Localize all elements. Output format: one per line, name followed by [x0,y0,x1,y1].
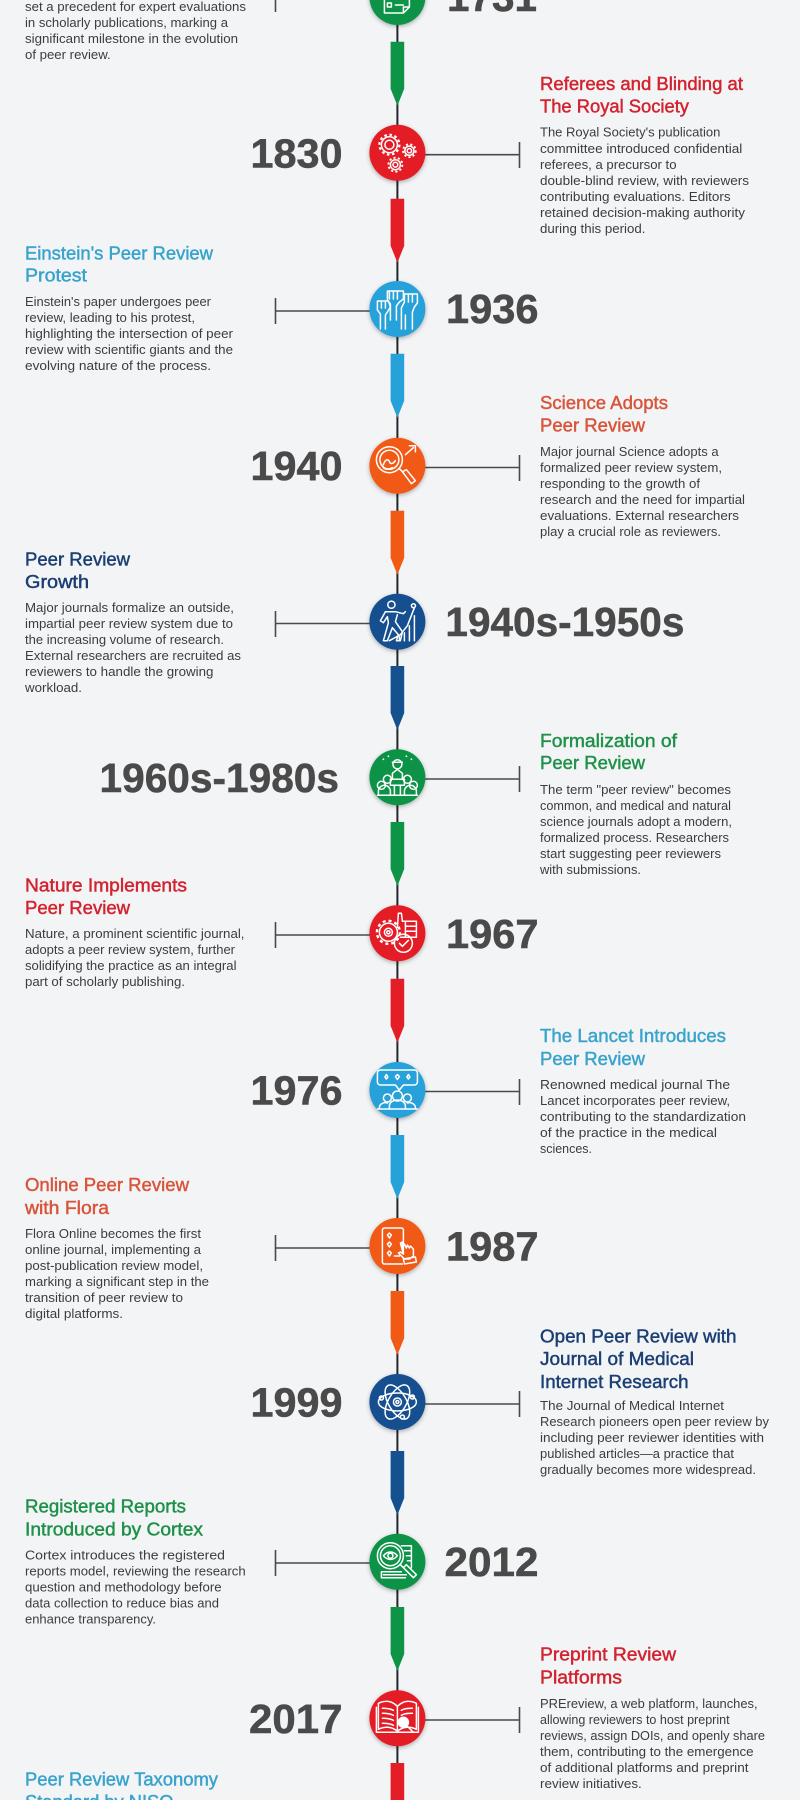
body text 2012: Cortex introduces the registered [25,1547,225,1562]
body text 1731 [25,0,246,62]
body text 1960s-1980s: common, and medical and natural [540,798,731,813]
heading 1830: Referees and Blinding at [540,74,743,94]
body text 1999: The Journal of Medical Internet [540,1398,724,1413]
heading 1987: Online Peer Review [25,1175,190,1195]
heading 1940: Science Adopts [540,393,668,413]
entry: 1987 [24,1175,538,1321]
heading 1987 [24,1175,190,1218]
year 1960s-1980s: 1960s-1980s [100,755,339,801]
connector 1940s-1950s [276,611,370,637]
body text 1940: research and the need for impartial [540,492,745,507]
connector 1976 [425,1079,520,1105]
body text 2012 [25,1547,246,1626]
arrow bar green [391,42,404,106]
body text 1830: The Royal Society's publication [540,125,720,140]
body text 1940s-1950s: workload. [24,680,82,695]
heading 1987: with Flora [24,1198,110,1218]
icon: meeting table [369,749,425,805]
heading 1976 [540,1026,726,1069]
connector 1940 [425,455,520,481]
entry: 1731 [25,0,537,62]
body text 2012: enhance transparency. [25,1612,156,1626]
body text 1960s-1980s: with submissions. [539,862,641,877]
heading 1940s-1950s: Peer Review [25,550,131,570]
body text 1999: Research pioneers open peer review by [540,1414,769,1429]
body text 2012: reports model, reviewing the research [25,1564,246,1578]
body text 1976: of the practice in the medical [540,1125,717,1140]
entry: 1940 [250,393,745,539]
heading 1999: Internet Research [540,1372,688,1392]
body text 1976: contributing to the standardization [540,1109,746,1124]
arrow bar green 2 [391,822,404,886]
arrow bar red 3 [391,1763,404,1800]
heading 2012: Introduced by Cortex [25,1520,203,1540]
connector 1960s-1980s [425,766,520,792]
heading 1999: Journal of Medical [540,1349,694,1369]
year 1936: 1936 [446,286,538,332]
connector 2017 [425,1707,520,1733]
body text 1987: online journal, implementing a [25,1242,202,1257]
heading 1976: The Lancet Introduces [540,1026,726,1046]
body text 1987: digital platforms. [25,1306,123,1321]
entry: 1936 [25,243,538,373]
body text 1960s-1980s: start suggesting peer reviewers [540,846,721,861]
heading 1999: Open Peer Review with [540,1326,736,1346]
body text 1830: committee introduced confidential [540,141,742,156]
timeline spine [396,0,398,1800]
year 2017: 2017 [249,1696,342,1742]
heading 1936: Einstein's Peer Review [25,243,214,263]
body text 1731: in scholarly publications, marking a [25,15,229,30]
heading 1967: Nature Implements [25,876,187,896]
icon: rating bubble and people [369,1062,425,1118]
heading 1960s-1980s [540,731,678,773]
heading 1936 [25,243,214,286]
body text 1987: transition of peer review to [25,1290,183,1305]
entry: 1960s-1980s [100,731,732,877]
heading 1967 [25,876,187,918]
connector 2012 [276,1550,370,1576]
body text 1960s-1980s: The term "peer review" becomes [540,782,731,797]
body text 1987: Flora Online becomes the first [25,1226,201,1241]
year 1940: 1940 [250,443,342,489]
heading 1960s-1980s: Peer Review [540,753,646,773]
body text 1967: adopts a peer review system, further [25,942,236,957]
body text 2012: data collection to reduce bias and [25,1596,219,1610]
icon: gear thumb and check [369,905,425,961]
body text 1940s-1950s [24,600,242,695]
body text 1830 [540,125,750,236]
year 1967: 1967 [446,911,538,957]
body text 1967: part of scholarly publishing. [25,974,185,989]
entry: 2017 [249,1645,765,1791]
body text 1936: highlighting the intersection of peer [25,326,234,341]
body text 2017: of additional platforms and preprint [540,1760,749,1775]
icon: atom [369,1374,425,1430]
arrow bar orange 2 [391,1291,404,1355]
body text 2017: PREreview, a web platform, launches, [540,1696,758,1711]
heading 1960s-1980s: Formalization of [540,731,678,751]
body text 1830: double-blind review, with reviewers [540,173,750,188]
arrow bar navy 2 [391,1451,404,1515]
icon: phone rating with hand [369,1218,425,1274]
body text 1940: play a crucial role as reviewers. [540,524,721,539]
icon: climbing person and chart [369,594,425,650]
body text 1940: Major journal Science adopts a [540,444,719,459]
connector 1967 [276,922,370,948]
body text 1940s-1950s: impartial peer review system due to [25,616,233,631]
icon: open book with magnifier [369,1690,425,1746]
entry: 1999 [250,1326,769,1477]
connector 1987 [276,1235,370,1261]
heading 2017: Platforms [540,1667,622,1687]
year 1976: 1976 [250,1068,342,1114]
body text 1830: referees, a precursor to [540,157,676,172]
icon: magnifier with arrow [369,438,425,494]
entry: 1940s-1950s [24,550,684,695]
entry: 2012 [25,1496,538,1626]
body text 1987: marking a significant step in the [25,1274,209,1289]
body text 2017: them, contributing to the emergence [540,1744,754,1759]
icon: checklist [369,0,425,25]
body text 1999 [540,1398,769,1477]
body text 1731: significant milestone in the evolution [25,31,238,46]
body text 2017: allowing reviewers to host preprint [540,1712,730,1727]
heading 1830: The Royal Society [540,97,689,117]
body text 1830: contributing evaluations. Editors [540,189,731,204]
year 2012: 2012 [444,1539,538,1585]
body text 1936: review, leading to his protest, [25,310,195,325]
body text 1940s-1950s: reviewers to handle the growing [25,664,213,679]
heading 2017: Preprint Review [540,1645,677,1665]
heading 1936: Protest [25,266,87,286]
body text 1940: responding to the growth of [540,476,700,491]
body text 2017: review initiatives. [540,1776,642,1791]
heading 1940 [540,393,668,436]
body text 1936: Einstein's paper undergoes peer [25,294,212,309]
heading 1830 [540,74,743,117]
body text 1960s-1980s: formalized process. Researchers [540,830,729,845]
body text 1976: Lancet incorporates peer review, [540,1093,730,1108]
heading 1940s-1950s [25,550,131,592]
body text 1940: formalized peer review system, [540,460,722,475]
body text 2017: reviews, assign DOIs, and openly share [540,1728,765,1743]
connector 1830 [425,142,520,168]
body text 1976 [540,1077,746,1156]
body text 1830: retained decision-making authority [540,205,746,220]
heading: peer review taxonomy: Peer Review Taxonomy [25,1770,218,1790]
entry: 1967 [25,876,538,989]
body text 1940 [540,444,745,539]
body text 1960s-1980s: science journals adopt a modern, [540,814,732,829]
arrow bar navy [391,666,404,730]
body text 1987 [25,1226,209,1321]
icon: raised fists [369,281,425,337]
heading 2012 [25,1496,203,1540]
body text 1940s-1950s: Major journals formalize an outside, [25,600,234,615]
connector 1999 [425,1391,520,1417]
arrow bar red [391,199,404,263]
arrow bar red 2 [391,979,404,1043]
arrow bar blue 2 [391,1135,404,1199]
body text 1936: review with scientific giants and the [25,342,233,357]
icon: magnifier eye over document [369,1534,425,1590]
year 1830: 1830 [250,130,342,176]
heading 1940s-1950s: Growth [25,572,89,592]
body text 1999: gradually becomes more widespread. [540,1462,756,1477]
body text 1936 [25,294,234,373]
year 1999: 1999 [250,1380,342,1426]
year 1940s-1950s: 1940s-1950s [445,599,684,645]
body text 2017 [540,1696,765,1791]
body text 1731: of peer review. [25,47,111,62]
heading 1967: Peer Review [25,898,131,918]
body text 1967: solidifying the practice as an integral [25,958,237,973]
body text 1940s-1950s: the increasing volume of research. [25,632,224,647]
body text 1960s-1980s [539,782,732,877]
body text 1940s-1950s: External researchers are recruited as [25,648,242,663]
body text 1976: Renowned medical journal The [540,1077,730,1092]
body text 2012: question and methodology before [25,1580,222,1594]
arrow bar orange [391,511,404,575]
heading 1976: Peer Review [540,1049,646,1069]
connector 1731 [276,0,370,12]
body text 1976: sciences. [540,1141,592,1156]
body text 1999: published articles—a practice that [540,1446,734,1461]
icon: gears [369,125,425,181]
arrow bar blue [391,354,404,418]
heading: peer review taxonomy [25,1770,218,1800]
body text 1830: during this period. [540,221,645,236]
heading 1999 [540,1326,736,1392]
connector 1936 [276,298,370,324]
heading 2012: Registered Reports [25,1496,186,1516]
year 1987: 1987 [446,1224,538,1270]
arrow bar green 3 [391,1607,404,1671]
heading 1940: Peer Review [540,416,646,436]
body text 1987: post-publication review model, [25,1258,203,1273]
body text 1999: including peer reviewer identities with [540,1430,764,1445]
body text 1940: evaluations. External researchers [540,508,740,523]
entry: 1976 [250,1026,746,1156]
body text 1967 [25,926,244,989]
entry: 1830 [250,74,750,236]
body text 1967: Nature, a prominent scientific journal, [25,926,244,941]
heading 2017 [540,1645,677,1687]
body text 1936: evolving nature of the process. [25,358,211,373]
